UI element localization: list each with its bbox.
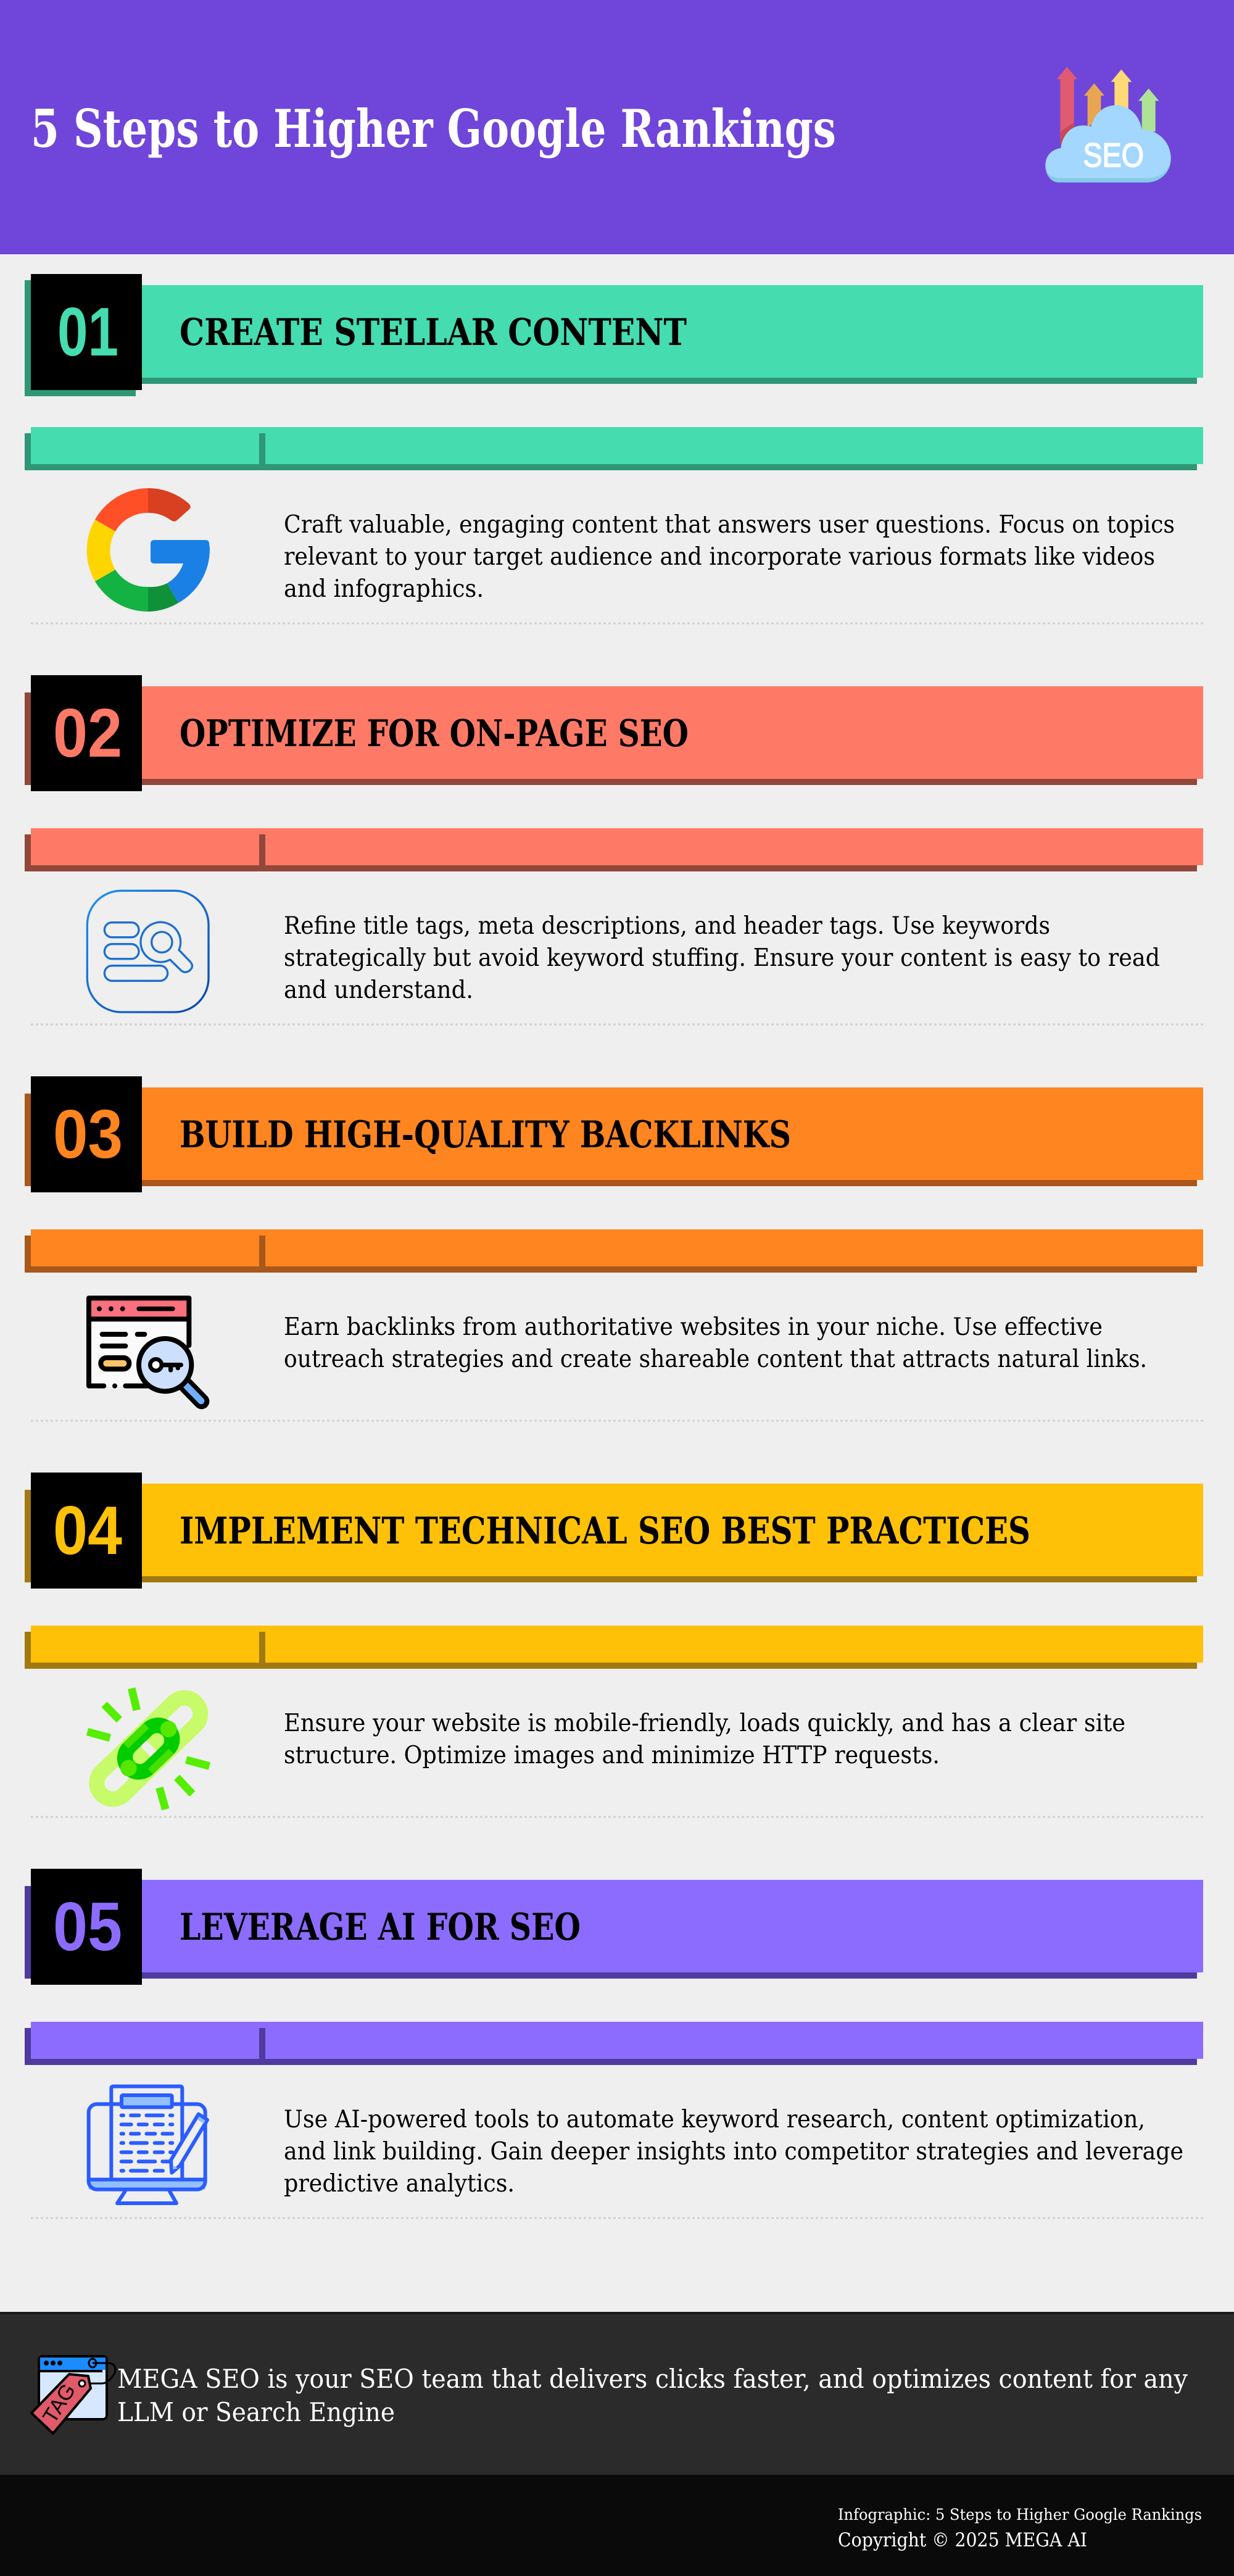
heading bar bbox=[31, 1880, 1203, 1972]
title: 5 Steps to Higher Google Rankings bbox=[31, 98, 836, 159]
description: relevant to your target audience and incorporate various formats like videos bbox=[284, 543, 1155, 571]
number badge bbox=[31, 1473, 142, 1589]
description: Use AI-powered tools to automate keyword research, content optimization, bbox=[284, 2106, 1145, 2134]
heading: OPTIMIZE FOR ON-PAGE SEO bbox=[180, 712, 689, 755]
description bbox=[284, 1710, 1125, 1769]
description: and link building. Gain deeper insights into competitor strategies and leverage bbox=[284, 2138, 1183, 2166]
divider bar bbox=[25, 1626, 1203, 1669]
icon: chain link bbox=[88, 1689, 209, 1809]
heading: CREATE STELLAR CONTENT bbox=[180, 311, 687, 354]
icon: browser window with key magnifier bbox=[89, 1298, 202, 1402]
header banner bbox=[0, 0, 1234, 254]
icon: Google G bbox=[87, 488, 210, 612]
description: Ensure your website is mobile-friendly, loads quickly, and has a clear site bbox=[284, 1710, 1125, 1737]
panel: step 3 bbox=[25, 1076, 1203, 1421]
divider bar bbox=[25, 2022, 1203, 2065]
description bbox=[284, 912, 1160, 1004]
description: Refine title tags, meta descriptions, and header tags. Use keywords bbox=[284, 912, 1050, 940]
banner shadow bbox=[25, 1490, 1197, 1582]
call to action text: LLM or Search Engine bbox=[117, 2397, 395, 2427]
call to action text bbox=[117, 2364, 1188, 2427]
description: strategically but avoid keyword stuffing. Ensure your content is easy to read bbox=[284, 944, 1160, 972]
description bbox=[284, 2106, 1183, 2198]
call to action text: MEGA SEO is your SEO team that delivers clicks faster, and optimizes content for any bbox=[117, 2364, 1188, 2394]
heading bar bbox=[31, 1484, 1203, 1576]
number badge: 05 bbox=[53, 1888, 122, 1965]
heading bar bbox=[31, 1087, 1203, 1180]
divider bar bbox=[25, 828, 1203, 871]
banner shadow bbox=[25, 1094, 1197, 1186]
icon: document on monitor with pencil bbox=[89, 2087, 207, 2203]
description: and understand. bbox=[284, 976, 473, 1004]
description: Craft valuable, engaging content that answers user questions. Focus on topics bbox=[284, 511, 1175, 539]
banner shadow bbox=[25, 692, 1197, 785]
panel: step 5 bbox=[25, 1869, 1203, 2218]
description: outreach strategies and create shareable content that attracts natural links. bbox=[284, 1345, 1147, 1373]
icon: SEO cloud with arrows: SEO bbox=[1083, 136, 1144, 174]
banner shadow bbox=[25, 1886, 1197, 1979]
heading: BUILD HIGH-QUALITY BACKLINKS bbox=[180, 1113, 791, 1157]
panel: call to action bbox=[0, 2312, 1234, 2475]
description: and infographics. bbox=[284, 575, 484, 603]
panel: step 2 bbox=[25, 675, 1203, 1024]
description: structure. Optimize images and minimize HTTP requests. bbox=[284, 1742, 940, 1769]
icon: browser tag: TAG bbox=[38, 2380, 80, 2427]
description: Earn backlinks from authoritative websites in your niche. Use effective bbox=[284, 1313, 1103, 1341]
description bbox=[284, 1313, 1147, 1373]
footer bbox=[0, 2475, 1234, 2576]
panel: step 1 bbox=[25, 274, 1203, 623]
description bbox=[284, 511, 1175, 603]
number badge: 03 bbox=[53, 1096, 123, 1173]
heading bar bbox=[31, 285, 1203, 378]
icon: browser tag bbox=[31, 2356, 115, 2433]
number badge: 01 bbox=[57, 294, 118, 370]
panel: step 4 bbox=[25, 1473, 1203, 1817]
divider bar bbox=[25, 1229, 1203, 1273]
footer credit: Infographic: 5 Steps to Higher Google Rankings bbox=[838, 2506, 1202, 2524]
icon: SEO cloud with arrows bbox=[1045, 67, 1171, 183]
number badge: 02 bbox=[53, 695, 122, 771]
heading bar bbox=[31, 686, 1203, 779]
heading: IMPLEMENT TECHNICAL SEO BEST PRACTICES bbox=[180, 1510, 1030, 1553]
banner shadow bbox=[25, 280, 1197, 396]
copyright: Copyright © 2025 MEGA AI bbox=[838, 2529, 1087, 2551]
number badge bbox=[31, 1076, 142, 1192]
number badge bbox=[31, 675, 142, 791]
heading: LEVERAGE AI FOR SEO bbox=[180, 1906, 581, 1949]
icon: keyword search bbox=[87, 891, 209, 1012]
number badge bbox=[31, 274, 142, 390]
number badge bbox=[31, 1869, 142, 1985]
number badge: 04 bbox=[53, 1492, 122, 1569]
description: predictive analytics. bbox=[284, 2170, 515, 2198]
divider bar bbox=[25, 427, 1203, 470]
